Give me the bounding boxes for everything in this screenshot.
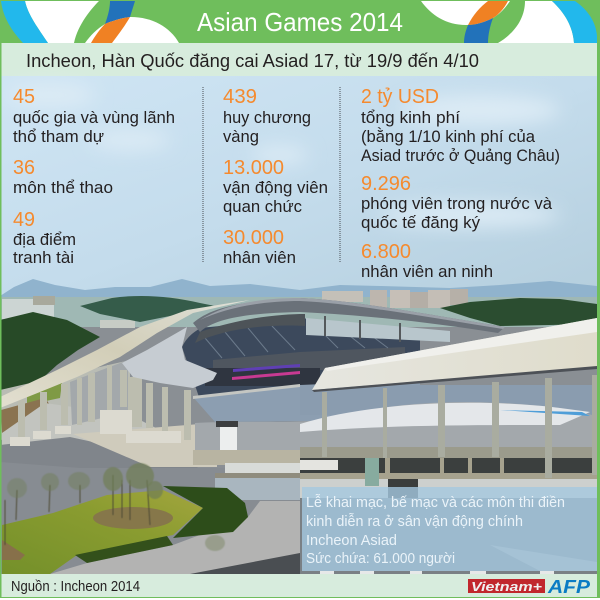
photo caption xyxy=(302,487,597,571)
stat column 3: tổng kinh phí xyxy=(361,108,460,127)
footer band xyxy=(0,574,600,597)
header banner xyxy=(0,1,600,43)
mountains xyxy=(0,279,597,312)
icon: right rings xyxy=(421,1,597,43)
stat column 1: quốc gia và vùng lãnh xyxy=(13,108,175,127)
stat column 1 xyxy=(13,85,175,267)
ground left xyxy=(0,360,230,525)
stat column 3 xyxy=(361,85,560,281)
stat column 1: 36 xyxy=(13,156,35,179)
silver mesh wing xyxy=(122,327,217,388)
photo caption: Incheon Asiad xyxy=(306,533,397,549)
photo caption: kinh diễn ra ở sân vận động chính xyxy=(306,513,523,530)
logo: AFP: AFP xyxy=(547,577,591,597)
stat column 2: nhân viên xyxy=(223,248,296,267)
stat column 2: huy chương xyxy=(223,108,311,127)
stat column 2: 13.000 xyxy=(223,156,284,179)
left sweeping roof xyxy=(0,300,250,408)
subtitle band: Incheon, Hàn Quốc đăng cai Asiad 17, từ 19/9 đến 4/10 xyxy=(26,51,479,71)
divider xyxy=(339,87,341,263)
stat column 2: quan chức xyxy=(223,197,302,216)
stat column 2: vàng xyxy=(223,127,259,146)
parking lot xyxy=(300,498,600,574)
logo: Vietnam+: Vietnam+ xyxy=(471,579,542,594)
stat column 1: 49 xyxy=(13,208,35,231)
stat column 2: 30.000 xyxy=(223,226,284,249)
stat column 3: phóng viên trong nước và xyxy=(361,194,553,213)
stat column 3: quốc tế đăng ký xyxy=(361,213,480,232)
sky xyxy=(0,76,600,301)
asphalt and concrete ground xyxy=(0,462,300,574)
stadium truss roof xyxy=(193,298,505,343)
stadium interior xyxy=(182,318,600,422)
distant town xyxy=(0,289,600,328)
right concrete level xyxy=(193,447,600,501)
icon: left rings xyxy=(1,1,179,43)
stat column 2: 439 xyxy=(223,85,257,108)
stat column 3: 6.800 xyxy=(361,240,411,263)
stat column 2 xyxy=(223,85,328,267)
stat column 3: Asiad trước ở Quảng Châu) xyxy=(361,146,560,165)
right roof columns xyxy=(322,375,597,478)
stat column 1: địa điểm xyxy=(13,230,76,249)
curved silver building xyxy=(195,402,597,460)
right stadium roof xyxy=(312,318,597,392)
purple and magenta advertising bands xyxy=(233,364,300,372)
stat column 1: tranh tài xyxy=(13,248,74,267)
stat column 1: thổ tham dự xyxy=(13,127,104,146)
stat column 3: (bằng 1/10 kinh phí của xyxy=(361,127,536,146)
title: Asian Games 2014 xyxy=(197,7,403,37)
stat column 1: môn thể thao xyxy=(13,178,113,197)
stat column 3: 2 tỷ USD xyxy=(361,85,439,108)
photo caption: Sức chứa: 61.000 người xyxy=(306,551,455,567)
lawn and hedges xyxy=(2,486,248,574)
curved left facade glazing xyxy=(70,360,128,425)
forests xyxy=(0,296,597,395)
stat column 3: 9.296 xyxy=(361,172,411,195)
stat column 2: vận động viên xyxy=(223,178,328,197)
divider xyxy=(202,87,204,263)
seat aisle lines xyxy=(205,326,388,358)
stat column 1: 45 xyxy=(13,85,35,108)
trees xyxy=(5,463,225,551)
stat column 3: nhân viên an ninh xyxy=(361,262,493,281)
source note: Nguồn : Incheon 2014 xyxy=(11,579,140,595)
left columns xyxy=(18,365,191,440)
photo caption: Lễ khai mạc, bế mạc và các môn thi điền xyxy=(306,494,565,511)
low concrete platforms xyxy=(10,410,181,446)
subtitle band xyxy=(0,43,600,76)
